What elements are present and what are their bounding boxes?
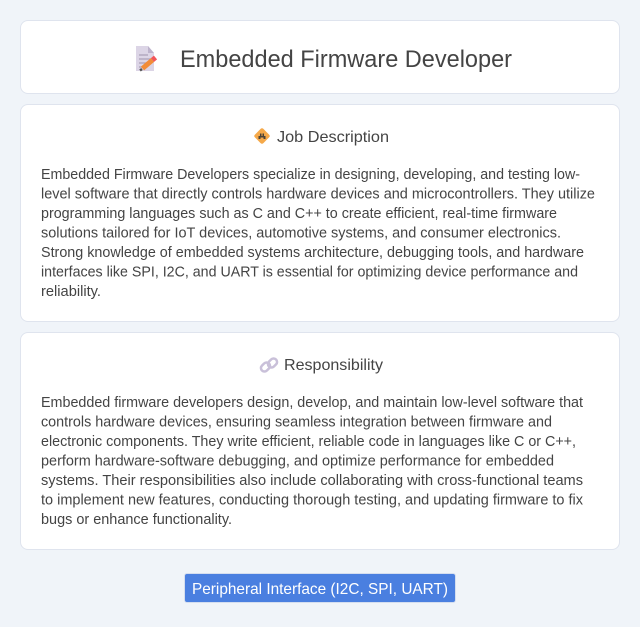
title: Embedded Firmware Developer — [180, 46, 512, 73]
text block: responsibility — [41, 395, 584, 528]
text block: responsibility: Embedded firmware developers design, develop, and maintain low-level software that — [41, 395, 583, 411]
icon: diamond puzzle — [254, 128, 270, 144]
heading: responsibility: Responsibility — [284, 357, 383, 374]
text block: responsibility: controls hardware devices, ensuring seamless integration between firmware and — [41, 414, 552, 430]
text block: job description: solutions tailored for IoT devices, automotive systems, and consumer electronics. — [41, 226, 561, 242]
panel: job description card — [20, 104, 620, 322]
text block: responsibility: to implement new features, conducting thorough testing, and updating firmware to fix — [41, 492, 584, 508]
text block: responsibility: electronic components. They write efficient, reliable code in languages like C or C++, — [41, 434, 576, 450]
heading: job description: Job Description — [277, 129, 389, 146]
tag label: Peripheral Interface (I2C, SPI, UART) — [192, 581, 448, 598]
icon: chain link — [259, 357, 279, 373]
text block: job description: programming languages such as C and C++ to create efficient, real-time firmware — [41, 206, 557, 222]
text block: responsibility: systems. Their responsibilities also include collaborating with cross-functional teams — [41, 473, 583, 489]
text block: job description: reliability. — [41, 284, 101, 300]
text block: responsibility: perform hardware-software debugging, and optimize performance for embedded — [41, 454, 554, 470]
panel: title card — [20, 20, 620, 94]
panel: responsibility card — [20, 332, 620, 550]
text block: job description: interfaces like SPI, I2C, and UART is essential for optimizing device performance and — [41, 264, 578, 280]
text block: job description: level software that directly controls hardware devices and microcontrollers. They utilize — [41, 186, 595, 202]
tag button — [184, 573, 456, 603]
icon: document with pencil — [136, 46, 156, 71]
text block: responsibility: bugs or enhance functionality. — [41, 512, 232, 528]
text block: job description: Embedded Firmware Developers specialize in designing, developing, and testing low- — [41, 167, 580, 183]
text block: job description — [41, 167, 595, 300]
text block: job description: Strong knowledge of embedded systems architecture, debugging tools, and hardware — [41, 245, 584, 261]
